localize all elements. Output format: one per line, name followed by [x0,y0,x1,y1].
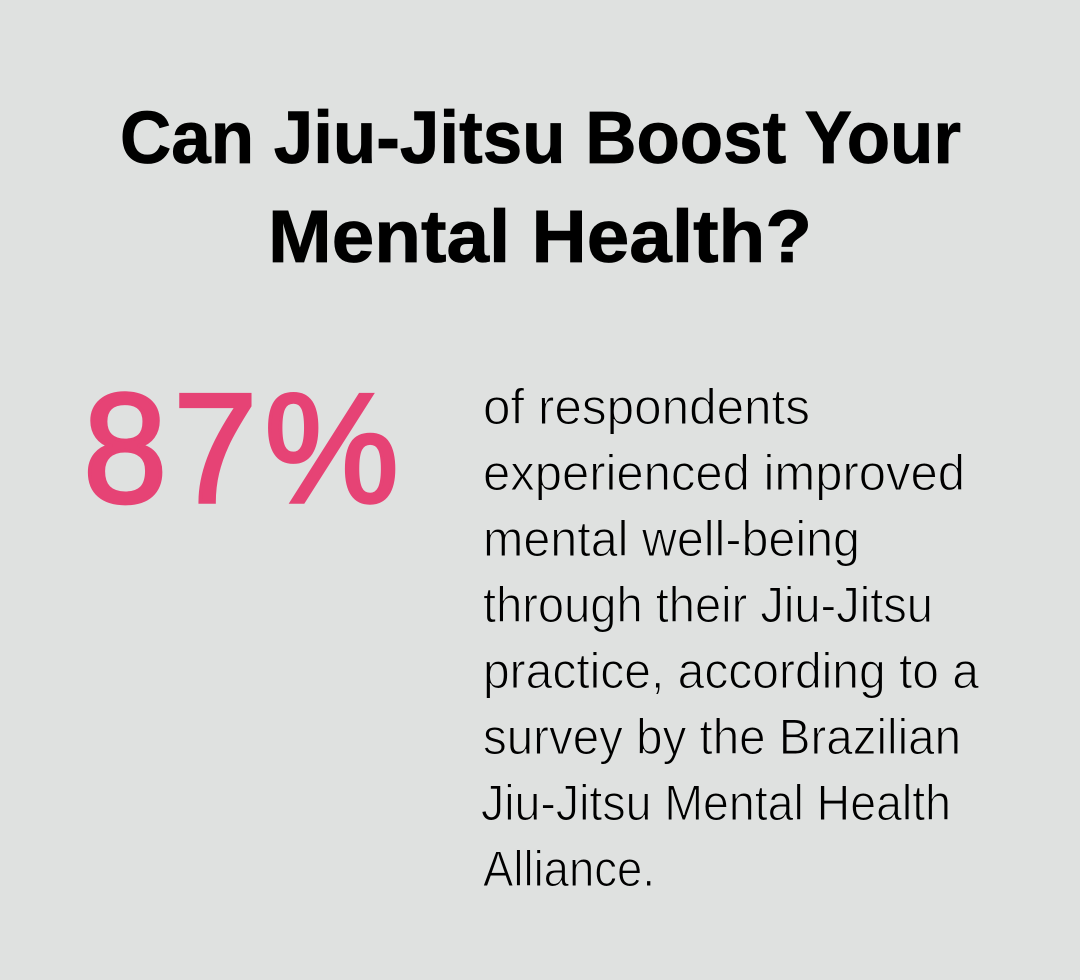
description text: Jiu-Jitsu Mental Health [481,775,951,831]
description text [481,379,979,897]
description text: through their Jiu-Jitsu [483,577,933,633]
title: Can Jiu-Jitsu Boost Your [120,96,961,179]
description text: of respondents [483,379,810,435]
title: Mental Health? [268,195,812,278]
description text: survey by the Brazilian [483,709,961,765]
title [120,96,961,278]
description text: Alliance. [483,841,655,897]
description text: experienced improved [483,445,965,501]
description text: practice, according to a [483,643,979,699]
big statistic: 87% [83,361,399,535]
description text: mental well-being [483,511,860,567]
